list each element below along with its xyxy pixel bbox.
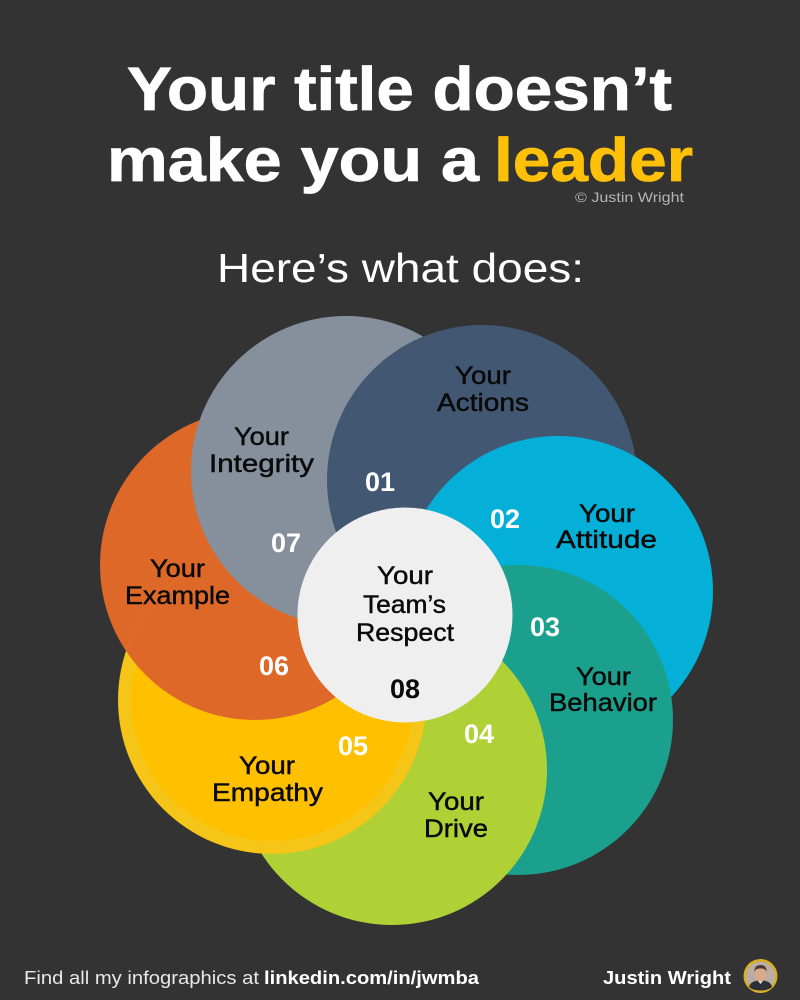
segment 07: your integrity: Integrity xyxy=(209,450,315,478)
segment 08: your team's respect: Team’s xyxy=(363,591,446,619)
segment 02: your attitude: Your xyxy=(579,500,635,528)
segment 06: your example: 06 xyxy=(259,651,289,681)
segment 03: your behavior: Behavior xyxy=(549,689,657,717)
copyright credit: © Justin Wright xyxy=(575,189,684,205)
segment 08: your team's respect: Your xyxy=(377,562,433,590)
segment 06: your example: Example xyxy=(125,582,230,610)
segment 05: your empathy: 05 xyxy=(338,731,368,761)
title xyxy=(107,55,693,194)
segment 07: your integrity: 07 xyxy=(271,528,301,558)
title: leader xyxy=(494,126,693,194)
segment 06: your example: Your xyxy=(150,555,205,583)
segment 01: your actions: Your xyxy=(455,362,511,390)
segment 02: your attitude: Attitude xyxy=(556,526,657,554)
overlapping circles diagram xyxy=(100,316,713,925)
segment 03: your behavior: 03 xyxy=(530,612,560,642)
segment 08: your team's respect: Respect xyxy=(356,619,454,647)
subtitle: Here’s what does: xyxy=(217,245,584,291)
segment 02: your attitude xyxy=(490,500,657,554)
segment 05: your empathy: Your xyxy=(239,752,295,780)
title: Your title doesn’t xyxy=(127,55,672,123)
segment 04: your drive: Drive xyxy=(424,815,488,843)
segment 04: your drive: Your xyxy=(428,788,484,816)
segment 05: your empathy xyxy=(212,731,368,807)
segment 01: your actions xyxy=(365,362,529,497)
segment 08: your team's respect: 08 xyxy=(390,674,420,704)
segment 03: your behavior: Your xyxy=(576,663,631,691)
segment 04: your drive: 04 xyxy=(464,719,494,749)
title: make you a xyxy=(107,126,480,194)
segment 01: your actions: Actions xyxy=(437,389,529,417)
icon: author avatar xyxy=(744,959,778,993)
segment 03: your behavior xyxy=(530,612,657,717)
segment 01: your actions: 01 xyxy=(365,467,395,497)
segment 07: your integrity xyxy=(209,423,315,558)
segment 08: your team's respect xyxy=(356,562,454,704)
segment 04: your drive xyxy=(424,719,494,843)
segment 06: your example xyxy=(125,555,289,681)
segment 02: your attitude: 02 xyxy=(490,504,520,534)
footer link text xyxy=(24,968,480,988)
footer link text: Find all my infographics at xyxy=(24,968,259,988)
footer link text: linkedin.com/in/jwmba xyxy=(264,968,480,988)
author name: Justin Wright xyxy=(603,968,731,988)
segment 05: your empathy: Empathy xyxy=(212,779,324,807)
segment 07: your integrity: Your xyxy=(234,423,289,451)
